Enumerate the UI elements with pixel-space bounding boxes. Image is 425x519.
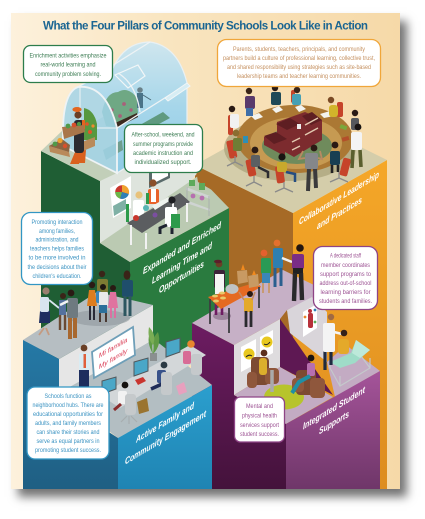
callout: neighborhood hubs: neighborhood hubs. There are — [32, 402, 104, 409]
callout: family interaction: administration, and — [36, 236, 79, 244]
pillar: family engagement block — [23, 292, 212, 489]
potted plant — [148, 327, 159, 361]
girl in pink — [108, 285, 118, 318]
woman walking — [39, 287, 59, 335]
callout: neighborhood hubs: educational opportunities for — [33, 411, 104, 418]
callout: collaborative leadership: leadership teams and teacher learning communities. — [237, 73, 361, 80]
label: collaborative leadership: Collaborative Leadership — [299, 170, 379, 228]
bake sale table and people — [208, 240, 304, 333]
seated man — [151, 362, 172, 395]
posters — [241, 330, 273, 372]
callout: neighborhood hubs: can share their stories and — [36, 429, 100, 436]
callout: family interaction — [22, 212, 92, 284]
callout: dedicated staff: learning barriers for — [320, 289, 371, 296]
left armchair — [247, 350, 279, 392]
girl in blue — [273, 240, 292, 287]
callout: collaborative leadership: and shared responsibility using strategies such as site-based — [227, 64, 371, 71]
callout: enrichment: real-world learning and — [40, 62, 96, 68]
school building — [264, 112, 322, 158]
computer lab — [100, 338, 206, 424]
callout: dedicated staff: address out-of-school — [320, 280, 372, 287]
counselling area — [241, 304, 370, 410]
hospital bed — [330, 340, 370, 386]
boy — [59, 293, 66, 330]
callout: enrichment: Enrichment activities emphasize — [30, 52, 107, 60]
seated woman pink — [176, 340, 202, 395]
greenhouse — [41, 42, 190, 181]
label: expanded and enriched learning: Opportunities — [159, 259, 204, 296]
label: integrated student supports: Integrated Student — [303, 385, 365, 432]
seated child — [114, 382, 137, 424]
callout: dedicated staff — [314, 246, 378, 310]
round table with school building — [224, 105, 356, 181]
man in purple — [292, 244, 304, 301]
right armchair — [292, 355, 325, 398]
child on bed — [338, 330, 349, 354]
poster: pie chart — [110, 176, 131, 218]
callout: after-school: After-school, weekend, and — [132, 132, 195, 138]
callout: family interaction: Promoting interaction — [32, 219, 83, 226]
callout: dedicated staff: students and families. — [319, 298, 372, 305]
callout: enrichment — [24, 46, 112, 82]
callout: after-school: individualized support. — [134, 159, 192, 166]
callout: collaborative leadership: partners build a culture of professional learning, collective trust, — [223, 55, 375, 62]
callout: health services: physical health — [242, 412, 277, 420]
plants in greenhouse — [102, 90, 138, 128]
board: Mi familia — [99, 335, 127, 360]
board: My family — [99, 346, 129, 371]
man behind — [97, 271, 108, 293]
callout: health services: services support — [240, 422, 279, 429]
pillar: expanded learning block — [41, 105, 229, 400]
classroom wall details and lab table — [110, 162, 212, 249]
pillar: collaborative leadership block — [195, 112, 387, 489]
family group on upper platform — [39, 270, 133, 339]
callout: dedicated staff: member coordinates — [321, 262, 370, 269]
callout: collaborative leadership: Parents, students, teachers, principals, and community — [233, 46, 366, 53]
crate on ground — [49, 138, 70, 157]
woman serving — [214, 260, 225, 315]
callout: neighborhood hubs — [27, 387, 109, 459]
gardener with crate — [49, 107, 86, 164]
label: collaborative leadership: and Practices — [317, 195, 362, 232]
child in yellow — [239, 291, 255, 327]
monitors — [102, 338, 180, 394]
callout: neighborhood hubs: Schools function as — [44, 393, 92, 400]
label: integrated student supports: Supports — [319, 409, 349, 437]
teacher — [79, 345, 90, 388]
callout: family interaction: to be more involved in — [28, 254, 86, 262]
label: expanded and enriched learning — [143, 220, 222, 296]
boy with backpack — [96, 284, 108, 322]
label: collaborative leadership — [299, 170, 379, 232]
label: active family engagement: Active Family and — [135, 400, 195, 446]
callout: dedicated staff: support programs to — [320, 271, 371, 278]
tomato plant — [82, 108, 97, 151]
board — [92, 327, 135, 378]
doctor — [323, 314, 342, 370]
students at lab table — [126, 179, 190, 249]
front arch — [63, 87, 117, 173]
callout: after-school: summer programs provide — [133, 141, 193, 148]
callout: after-school: academic instruction and — [133, 150, 193, 157]
man with vest — [60, 290, 78, 339]
classroom board and teacher — [79, 327, 159, 388]
pillar: integrated student supports block — [192, 270, 380, 489]
chairs — [226, 90, 351, 184]
title: What the Four Pillars of Community Schools Look Like in Action — [43, 20, 368, 32]
people around round table — [226, 85, 362, 192]
callout: health services: student success. — [240, 431, 279, 438]
label: active family engagement — [125, 400, 206, 468]
panel: expanded learning callouts — [24, 46, 202, 172]
woman in orange — [87, 282, 97, 320]
callout: enrichment: community problem solving. — [35, 71, 101, 78]
girl in green — [261, 250, 271, 293]
paper bags — [237, 270, 259, 288]
woman in teal — [122, 270, 133, 316]
callout: family interaction: children's education. — [32, 273, 82, 280]
lab cart — [186, 180, 210, 216]
label: active family engagement: Community Engagement — [125, 409, 206, 468]
label: expanded and enriched learning: Learning Time and — [152, 240, 213, 287]
health poster — [303, 304, 317, 337]
callout: neighborhood hubs: serve as equal partners in — [36, 438, 100, 445]
label: integrated student supports — [303, 385, 365, 437]
standing man in grey — [299, 145, 322, 191]
callout: family interaction: teachers helps families — [30, 246, 84, 252]
standing man white shirt — [351, 124, 362, 168]
callout: neighborhood hubs: adults, and family members — [35, 420, 101, 427]
callout: health services — [234, 397, 284, 442]
papers — [251, 105, 334, 120]
callout: health services: Mental and — [246, 403, 273, 410]
callout: family interaction: the decisions about their — [28, 264, 87, 271]
callout: dedicated staff: A dedicated staff — [330, 252, 361, 260]
label: expanded and enriched learning: Expanded and Enriched — [143, 220, 222, 277]
callout: neighborhood hubs: promoting student success. — [35, 447, 101, 454]
callout: collaborative leadership — [218, 40, 380, 86]
callout: after-school — [124, 124, 202, 172]
gardener in greenhouse — [137, 87, 151, 108]
callout: family interaction: among families, — [39, 228, 75, 235]
